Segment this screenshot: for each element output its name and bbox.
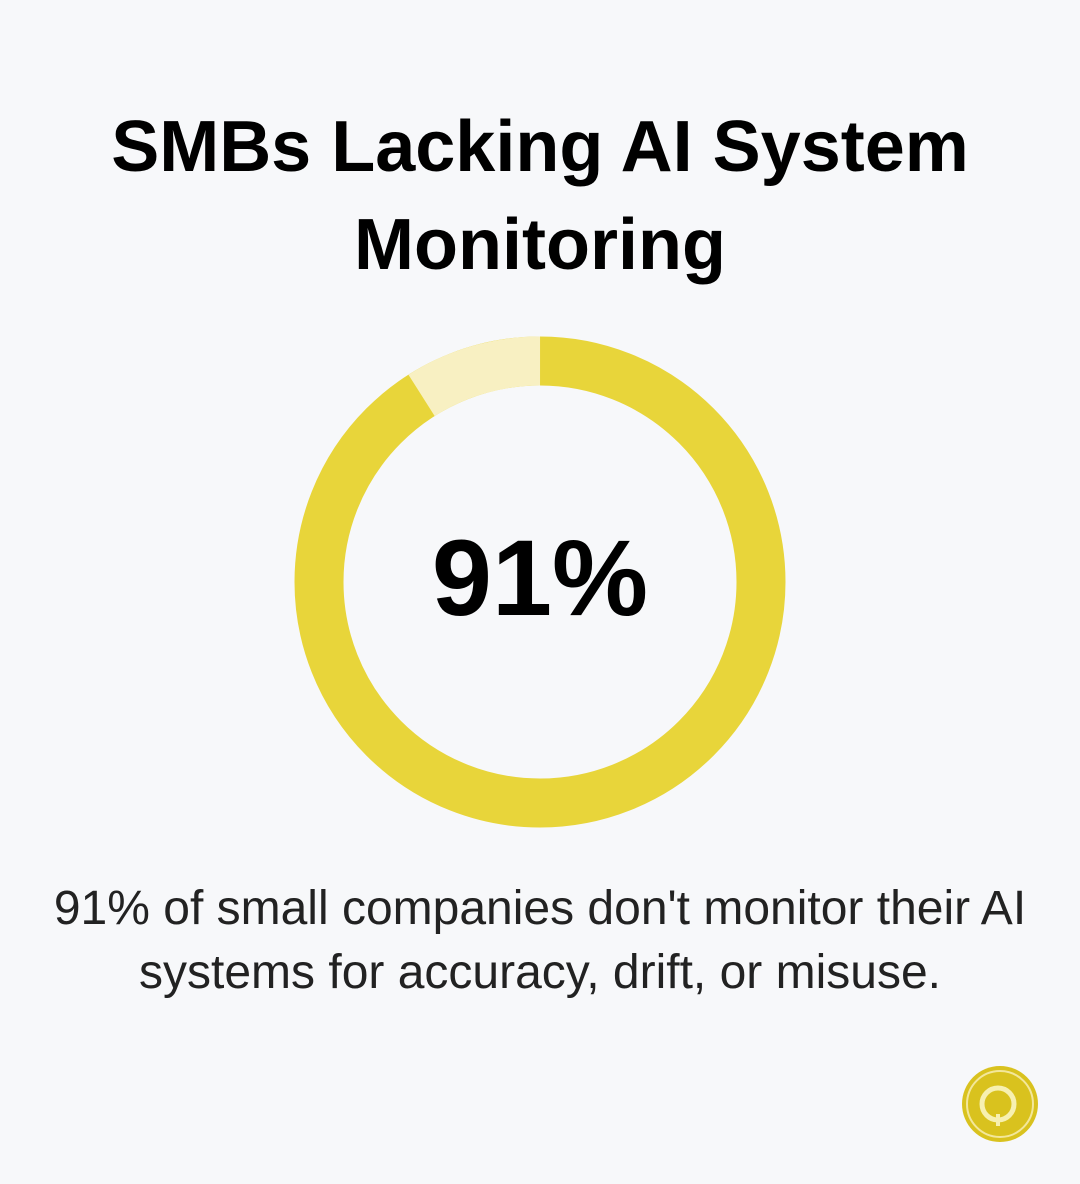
title [111, 107, 969, 285]
icon: logo [962, 1066, 1038, 1142]
donut chart: 91% [432, 517, 648, 638]
title: Monitoring [354, 205, 726, 285]
description text [54, 882, 1026, 999]
description text: systems for accuracy, drift, or misuse. [139, 946, 941, 999]
title: SMBs Lacking AI System [111, 107, 969, 187]
description text: 91% of small companies don't monitor their AI [54, 882, 1026, 935]
